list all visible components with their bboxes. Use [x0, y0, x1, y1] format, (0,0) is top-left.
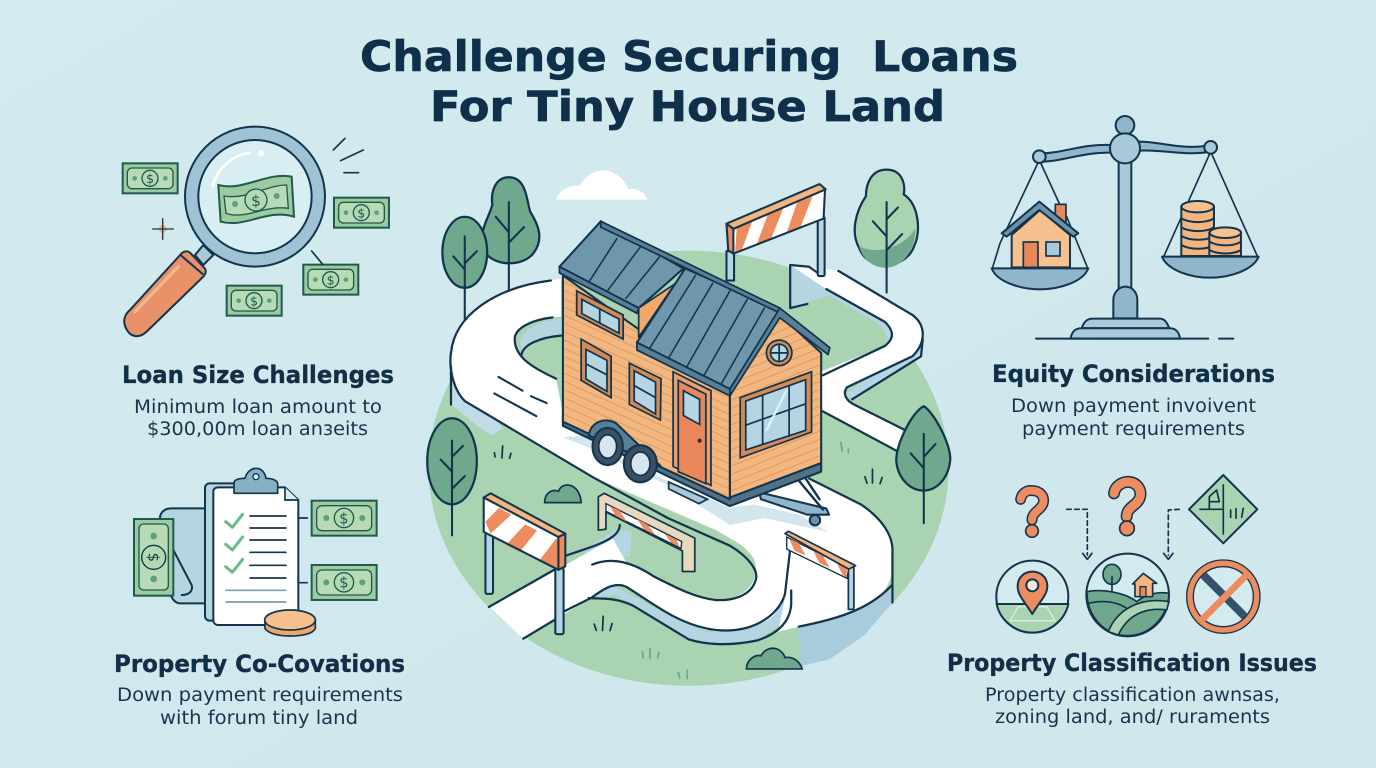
vertical bill: [134, 519, 173, 596]
back sheet: [205, 483, 245, 621]
panel: property co-covations: [114, 468, 405, 729]
dormer roof: [559, 221, 683, 308]
description: Down payment requirements: [117, 685, 403, 706]
main roof: [637, 268, 780, 389]
description: Down payment invoivent: [1011, 396, 1256, 417]
back folder: [160, 508, 213, 603]
bill: $: [339, 575, 349, 592]
question mark: [1021, 491, 1044, 537]
tiny house: [559, 221, 830, 525]
shadow under house: [563, 435, 828, 532]
barrier: lower right: [785, 531, 856, 609]
description: Minimum loan amount to: [134, 397, 382, 418]
central illustration: tiny house on winding road: [427, 170, 950, 686]
gable wall: [730, 315, 821, 497]
barrier: middle: [598, 493, 695, 571]
bill: $: [357, 205, 365, 220]
bill: [123, 163, 178, 193]
prohibition sign: [1187, 560, 1260, 633]
left pan with house: [992, 202, 1088, 289]
trailer base: [563, 417, 821, 506]
vertical bill: $: [144, 553, 161, 562]
icon: clipboard with money: [134, 468, 377, 636]
clip: [234, 468, 278, 493]
bill: [303, 265, 358, 295]
steps: [669, 482, 708, 504]
door: [673, 372, 711, 485]
description: with forum tiny land: [160, 708, 358, 729]
diamond sign: [1189, 475, 1257, 543]
title: Challenge Securing Loans: [360, 32, 1018, 81]
dormer cheek: [639, 284, 675, 337]
beam: [1040, 142, 1205, 162]
barrier: top: [726, 184, 826, 281]
tree: right: [896, 406, 950, 523]
strings: [993, 152, 1257, 267]
connectors: [299, 518, 307, 583]
round window: [766, 340, 792, 366]
description: $300,00m loan anɜeits: [147, 419, 368, 440]
title: [360, 32, 1018, 131]
money in lens: $: [251, 192, 261, 210]
heading: Property Classification Issues: [947, 649, 1317, 677]
panel: equity considerations: [992, 116, 1275, 440]
big window: [740, 372, 812, 458]
bill: $: [146, 171, 154, 186]
icon: balance scale: [992, 116, 1259, 339]
barrier: lower left: [484, 493, 565, 634]
money in lens: [218, 176, 294, 223]
dashed arrows: [1067, 509, 1179, 559]
right pan with coins: [1162, 201, 1259, 278]
bill: $: [250, 293, 258, 308]
panel: property classification issues: [947, 475, 1317, 728]
grass tufts and bushes: [494, 442, 882, 679]
title: For Tiny House Land: [430, 82, 945, 131]
checklist: [226, 514, 286, 602]
green ground circle: [429, 251, 949, 686]
description: [134, 397, 382, 440]
long wall: [563, 275, 730, 499]
description: zoning land, and/ ruraments: [995, 707, 1270, 728]
bill: $: [339, 510, 349, 527]
bill: [334, 198, 389, 228]
wheels: [589, 420, 661, 482]
bill: $: [327, 272, 335, 287]
windows on long wall: [577, 291, 661, 420]
heading: Loan Size Challenges: [122, 361, 394, 389]
hitch: [759, 479, 829, 525]
icon group: zoning symbols: [996, 475, 1260, 636]
tree: upper left pair: [442, 177, 539, 320]
icon: magnifier with money: [123, 127, 389, 336]
cloud: [556, 170, 647, 200]
coin: [265, 610, 315, 636]
page: [213, 487, 298, 625]
pole: [1119, 160, 1131, 290]
winding road: [450, 265, 923, 666]
tree: upper right: [855, 170, 918, 293]
heading: Equity Considerations: [992, 360, 1275, 388]
heading: Property Co-Covations: [114, 650, 405, 678]
panel: loan size challenges: [122, 127, 394, 440]
description: [117, 685, 403, 729]
bill: [312, 565, 377, 600]
description: [985, 685, 1280, 728]
description: Property classification awnsas,: [985, 685, 1280, 706]
magnifier lens: [192, 133, 318, 260]
tree: lower left: [427, 418, 477, 535]
farmland circle: [1086, 554, 1169, 636]
bill: [227, 286, 282, 316]
base: [1036, 287, 1233, 339]
map pin circle: [996, 561, 1068, 633]
magnifier handle: [124, 245, 213, 336]
question mark: [1114, 482, 1140, 536]
description: payment requirements: [1022, 419, 1245, 440]
bill: [312, 501, 377, 536]
sparkle and motion lines: [153, 138, 363, 264]
description: [1011, 396, 1256, 440]
